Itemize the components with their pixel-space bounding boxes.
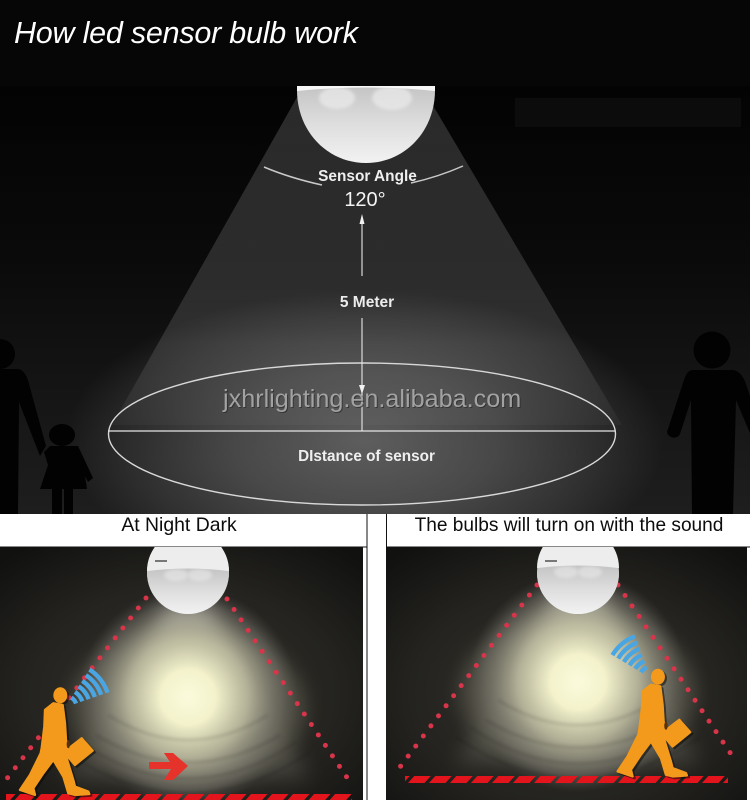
heading: At Night Dark xyxy=(121,514,237,536)
sensor angle arcs xyxy=(264,166,463,185)
title: How led sensor bulb work xyxy=(14,16,360,50)
panel: sensor range diagram xyxy=(0,86,750,514)
light cone xyxy=(112,92,622,425)
label: 5 meter: 5 Meter xyxy=(340,294,394,311)
watermark: jxhrlighting.en.alibaba.com xyxy=(222,385,521,413)
sensor bulb xyxy=(297,86,435,163)
arrow: height down xyxy=(359,318,365,431)
label: sensor angle: Sensor Angle xyxy=(318,168,417,185)
scene xyxy=(0,530,363,800)
red arrow xyxy=(149,753,188,780)
red floor stripes xyxy=(6,794,352,800)
sound waves xyxy=(610,634,648,674)
silhouette: adult and child xyxy=(0,339,93,514)
scene xyxy=(386,527,747,800)
label: distance of sensor: DIstance of sensor xyxy=(298,448,435,465)
header band xyxy=(0,0,750,86)
arrow: height up xyxy=(360,214,364,276)
dotted sensor range xyxy=(2,598,352,785)
sound waves xyxy=(70,668,110,704)
heading: The bulbs will turn on with the sound xyxy=(415,515,723,536)
walking person xyxy=(20,687,95,797)
walking person xyxy=(618,669,692,778)
floor ellipse xyxy=(108,363,616,505)
bulb xyxy=(537,547,619,614)
watermark: jxhrlighting.en.alibaba.com xyxy=(223,386,522,414)
label: 120 degrees: 120° xyxy=(344,189,386,211)
dotted sensor range xyxy=(400,585,737,767)
panel: bulbs turn on with the sound xyxy=(386,514,750,800)
silhouette: man xyxy=(667,332,750,514)
panel: at night dark xyxy=(0,514,368,800)
bulb xyxy=(147,547,229,614)
floor light pool xyxy=(92,305,638,514)
red floor stripes xyxy=(405,776,728,783)
